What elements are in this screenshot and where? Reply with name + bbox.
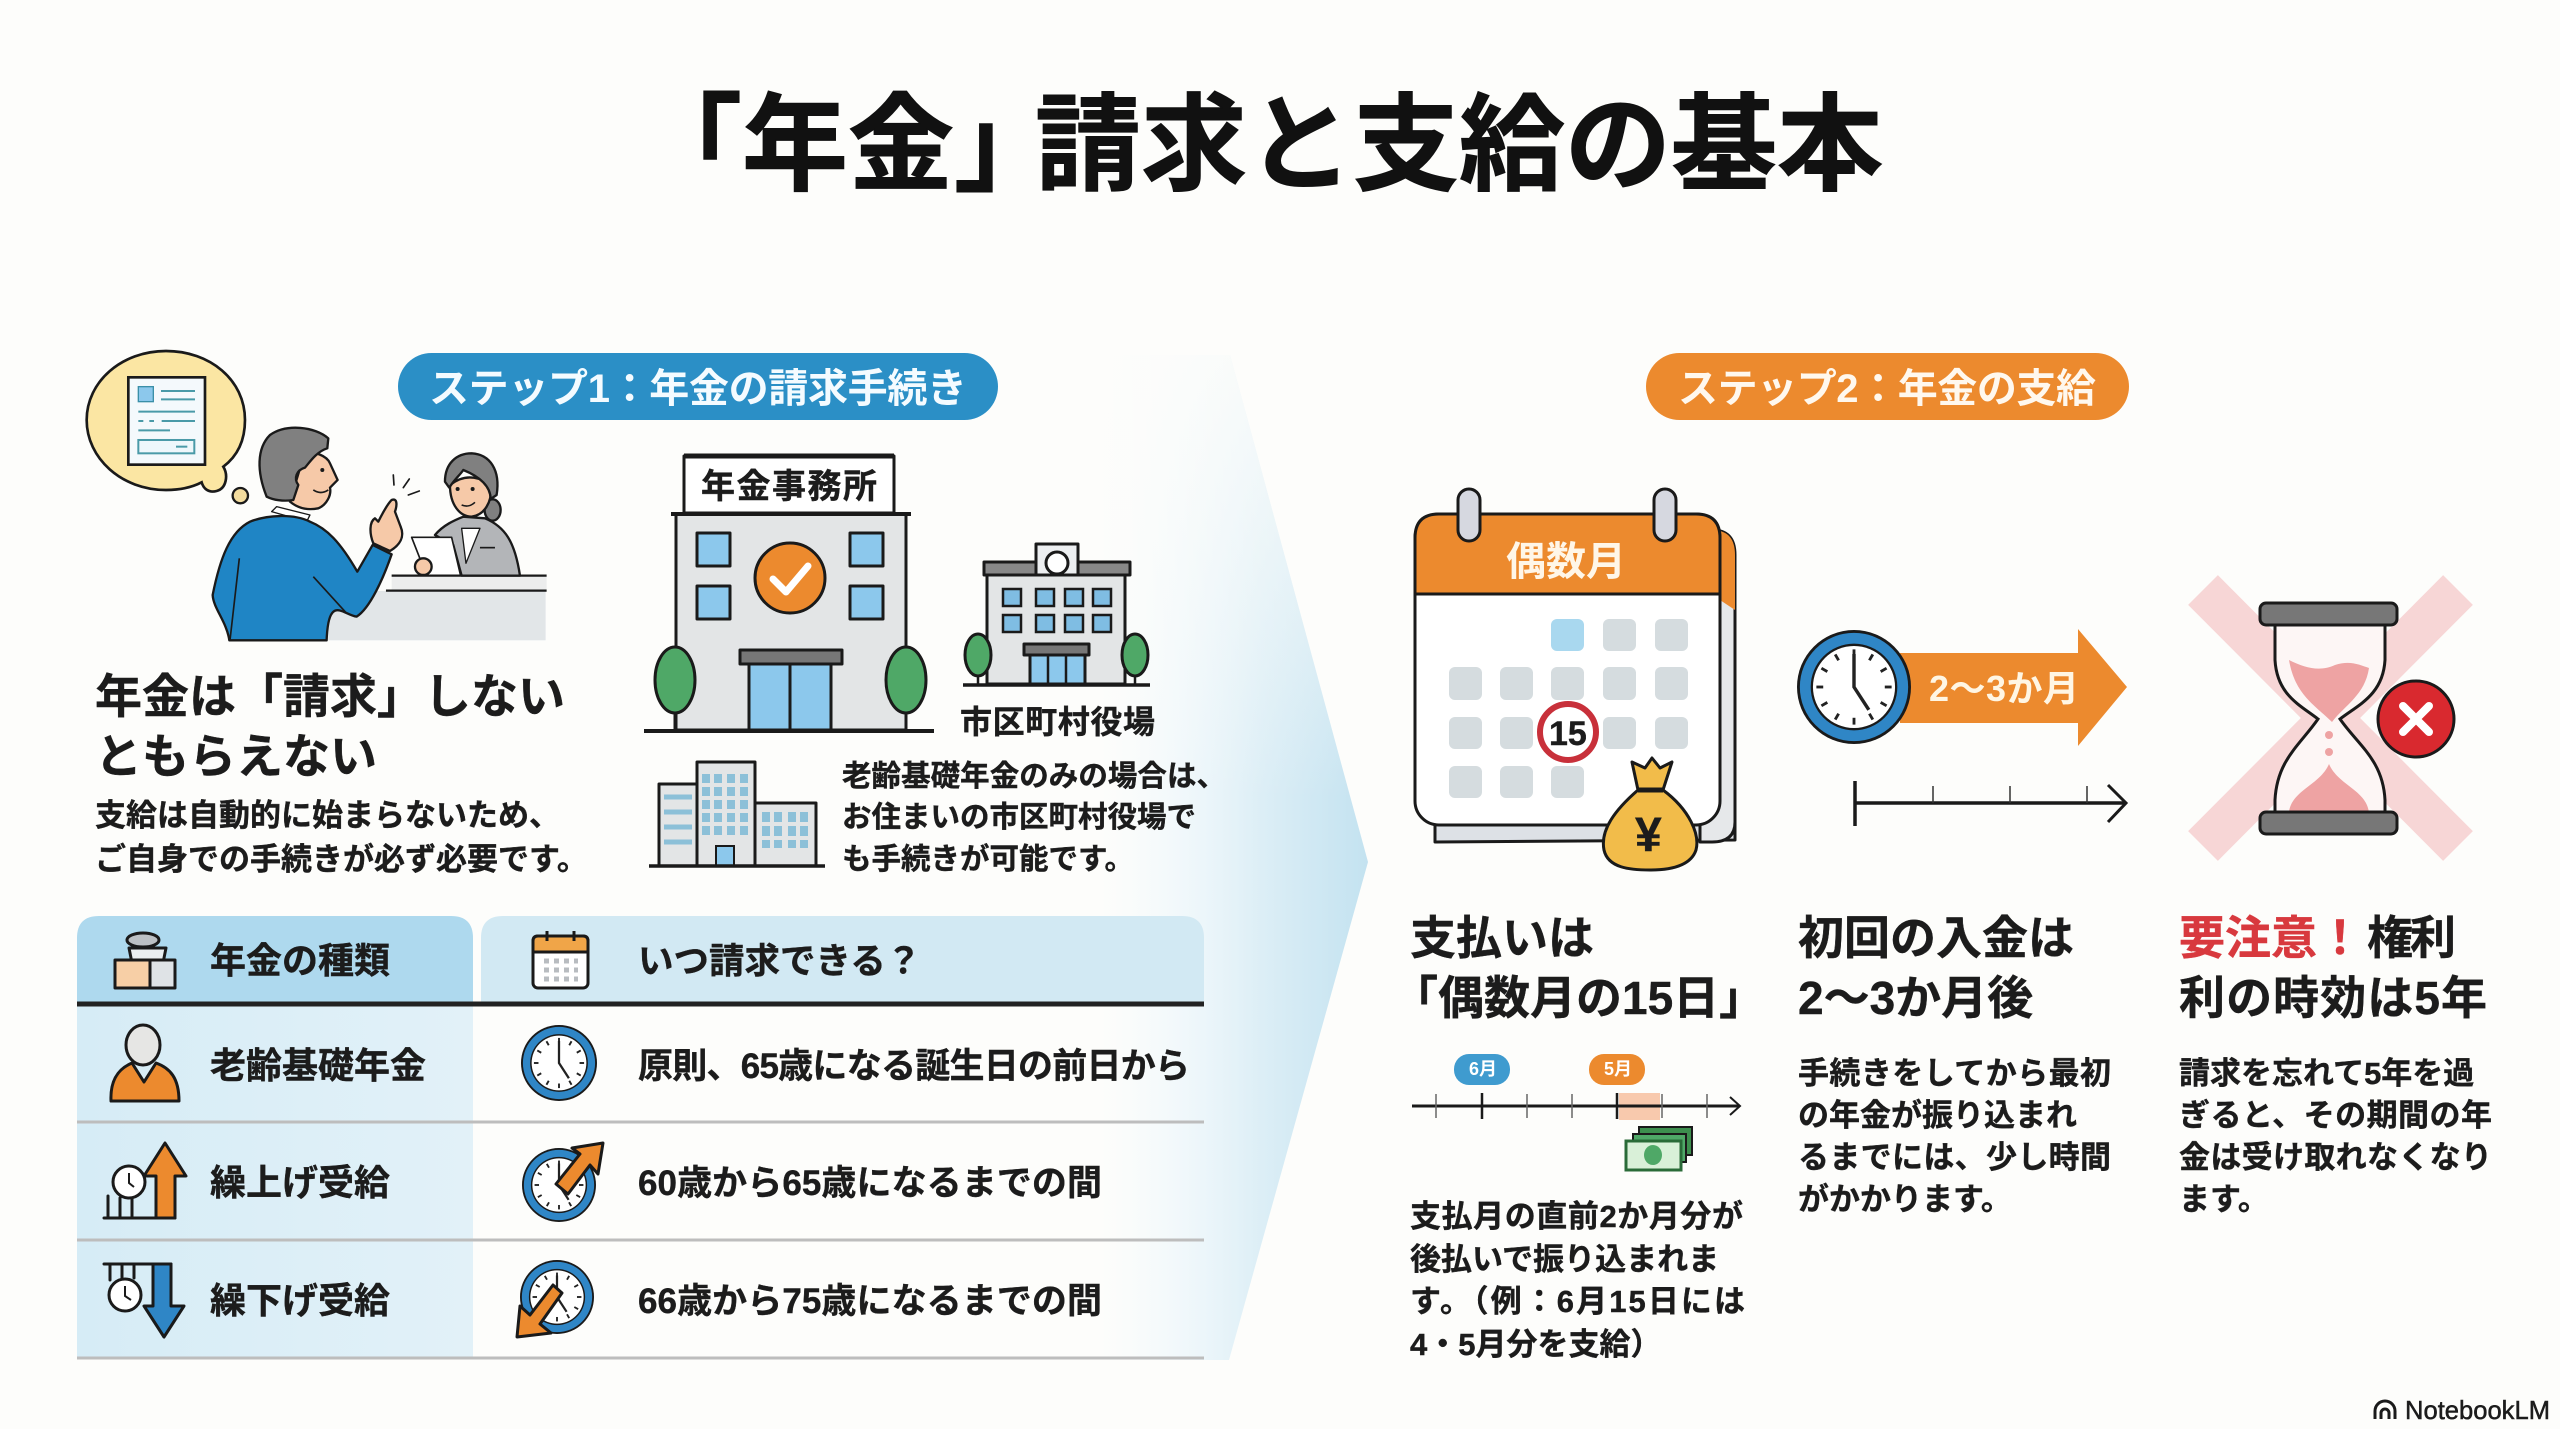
icon: yen money bag (1603, 758, 1697, 870)
text: payment explanation (1410, 1199, 1745, 1362)
illustration: man asking at counter (87, 351, 547, 640)
date 15 marker: 15 (1549, 715, 1587, 753)
text: caution explanation (2179, 1056, 2492, 1217)
hourglass (2260, 603, 2397, 834)
heading: first deposit (1798, 912, 2074, 1024)
pill: May (1589, 1054, 1645, 1085)
step 1 pill heading (398, 353, 998, 420)
arrow: 2〜3か月 (1929, 668, 2079, 709)
arrow (1900, 629, 2127, 746)
receptionist (412, 453, 520, 576)
table header: pension type: 年金の種類 (210, 940, 390, 981)
row 2: early claim: 60歳から65歳になるまでの間 (638, 1164, 1102, 1203)
heading: first deposit: 2〜3か月後 (1798, 972, 2033, 1024)
text: first deposit explanation (1798, 1056, 2111, 1217)
row 3: deferred claim: 66歳から75歳になるまでの間 (638, 1282, 1102, 1321)
calendar page (1415, 514, 1720, 825)
text: caution explanation: 請求を忘れて5年を過 (2179, 1056, 2474, 1091)
row 2: early claim (104, 1143, 1102, 1222)
text: first deposit explanation: がかかります。 (1798, 1182, 2012, 1217)
heading: payment date: 支払いは (1410, 912, 1594, 964)
step 2 pill heading: ステップ2：年金の支給 (1678, 367, 2096, 411)
heading: first deposit: 初回の入金は (1798, 912, 2074, 964)
text: caution explanation: 金は受け取れなくなり (2179, 1140, 2492, 1175)
illustration: city hall (963, 544, 1150, 685)
step 2 pill heading (1646, 353, 2129, 420)
icon: small calendar (533, 931, 588, 988)
step 1 pill heading: ステップ1：年金の請求手続き (429, 367, 967, 411)
table header: when to claim: いつ請求できる？ (638, 941, 921, 981)
row 3: deferred claim: 繰下げ受給 (210, 1280, 390, 1321)
icon: clock with rising arrow (522, 1143, 603, 1222)
pill: June: 6月 (1469, 1059, 1497, 1079)
icon: clock and up arrow (104, 1143, 186, 1218)
calendar header: 偶数月 (1506, 540, 1626, 584)
text: basic pension note: 老齢基礎年金のみの場合は、 (842, 760, 1226, 793)
pill: May: 5月 (1604, 1059, 1632, 1079)
row 1: basic pension (111, 1025, 1190, 1101)
illustration: hourglass with cross (2203, 590, 2458, 846)
row 3: deferred claim (104, 1260, 1102, 1337)
table: pension types and claim timing (77, 916, 1204, 1358)
heading: payment date (1392, 912, 1765, 1024)
heading: claim notice: 年金は「請求」しない (95, 670, 565, 723)
man (213, 428, 419, 640)
text: basic pension note: お住まいの市区町村役場で (842, 801, 1196, 834)
calendar back page (1435, 530, 1735, 842)
icon: clock and down arrow (104, 1264, 184, 1337)
text: claim explanation: ご自身での手続きが必ず必要です。 (95, 842, 588, 877)
text: basic pension note (842, 760, 1226, 876)
heading: payment date: 「偶数月の15日」 (1392, 972, 1765, 1024)
icon: pile of items (115, 933, 175, 988)
pill: June (1454, 1054, 1510, 1085)
check badge (755, 543, 825, 613)
date 15 marker (1540, 704, 1596, 760)
label: city hall: 市区町村役場 (960, 704, 1155, 740)
row 2: early claim: 繰上げ受給 (210, 1162, 390, 1203)
icon: person (111, 1025, 179, 1101)
text: first deposit explanation: るまでには、少し時間 (1798, 1140, 2111, 1175)
text: payment explanation: 4・5月分を支給） (1410, 1327, 1661, 1362)
heading: claim notice: ともらえない (95, 730, 377, 783)
icon: clock with falling arrow (517, 1260, 594, 1337)
clock (1797, 630, 1911, 744)
table header: when to claim (481, 916, 1204, 1002)
large pink cross (2203, 590, 2458, 846)
calendar header (1415, 514, 1720, 594)
text: first deposit explanation: の年金が振り込まれ (1798, 1098, 2077, 1133)
calendar day cells (1449, 619, 1688, 798)
timeline: elapsed time (1855, 781, 2126, 826)
office sign (684, 456, 894, 513)
red cross badge (2378, 681, 2454, 757)
title: 請求と支給の基本 (1035, 87, 1883, 205)
heading: caution: 要注意！ (2179, 912, 2363, 964)
watermark: NotebookLM: NotebookLM (2405, 1395, 2550, 1425)
heading: caution (2179, 912, 2487, 1024)
text: claim explanation (95, 798, 588, 877)
panel: step 1 arrow background (1100, 355, 1368, 1360)
icon: office buildings (649, 762, 825, 866)
text: claim explanation: 支給は自動的に始まらないため、 (95, 798, 560, 833)
text: first deposit explanation: 手続きをしてから最初 (1798, 1056, 2111, 1091)
table header: pension type (77, 916, 473, 1002)
heading: claim notice (95, 670, 565, 783)
text: payment explanation: 後払いで振り込まれま (1410, 1242, 1719, 1277)
office sign: 年金事務所 (701, 468, 877, 506)
heading: caution: 利の時効は5年 (2179, 972, 2487, 1024)
text: payment explanation: 支払月の直前2か月分が (1410, 1199, 1743, 1234)
row 1: basic pension: 老齢基礎年金 (210, 1045, 426, 1086)
timeline: payment months (1412, 1054, 1740, 1170)
text: payment explanation: す。（例：6月15日には (1410, 1284, 1745, 1319)
text: basic pension note: も手続きが可能です。 (842, 842, 1134, 876)
text: caution explanation: ぎると、その期間の年 (2179, 1098, 2492, 1133)
row 1: basic pension: 原則、65歳になる誕生日の前日から (638, 1047, 1190, 1086)
icon: banknotes (1626, 1127, 1692, 1170)
title: 「年金」 (636, 87, 1060, 205)
heading: caution: 権利 (2367, 912, 2456, 964)
thought bubble with form (87, 351, 248, 503)
illustration: pension office building (644, 456, 934, 731)
illustration: clock and 2-3 month arrow (1797, 629, 2127, 746)
icon: yen money bag: ¥ (1635, 809, 1662, 862)
text: caution explanation: ます。 (2179, 1182, 2269, 1217)
counter (328, 576, 547, 640)
icon: clock (521, 1025, 597, 1101)
illustration: even-month calendar with money bag (1415, 489, 1735, 870)
